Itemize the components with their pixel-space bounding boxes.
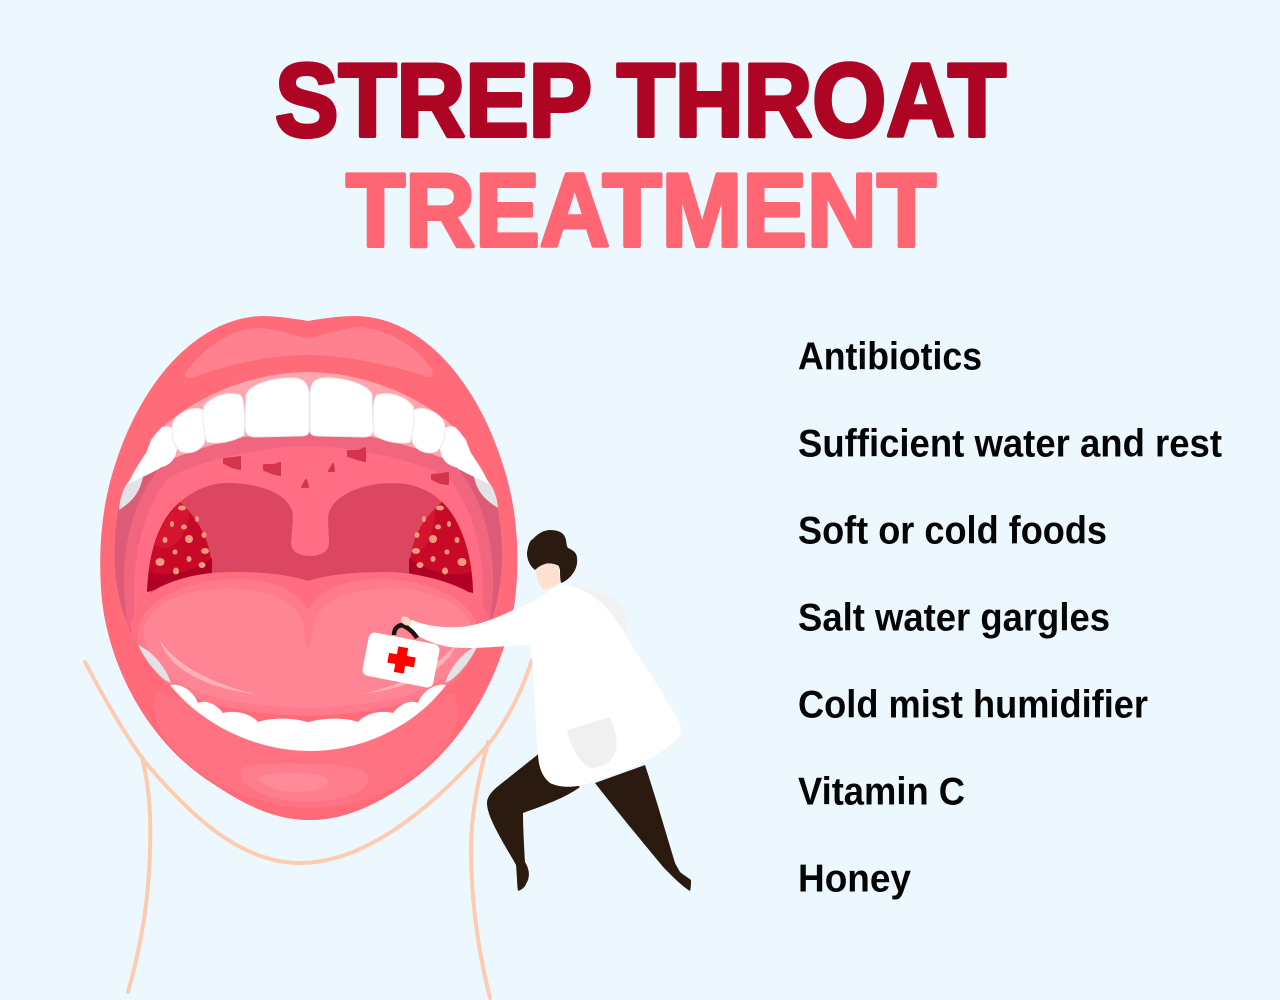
lips xyxy=(100,316,517,820)
doctor hair xyxy=(527,530,577,583)
case handle xyxy=(394,625,417,638)
treatment list xyxy=(798,336,1222,900)
case body xyxy=(361,632,441,688)
upper gum xyxy=(150,372,467,470)
doctor legs xyxy=(487,752,691,891)
illustration: doctor xyxy=(361,530,691,891)
illustration: neck and jaw outline xyxy=(85,660,532,998)
illustration: open mouth xyxy=(100,316,517,820)
throat and uvula xyxy=(148,483,472,600)
item: water and rest: Sufficient water and rest xyxy=(798,422,1222,466)
palate blotches xyxy=(224,448,448,487)
coat pocket xyxy=(567,717,617,768)
mouth interior xyxy=(115,372,502,660)
doctor back shadow xyxy=(570,585,627,640)
title xyxy=(275,43,1006,269)
left tonsil xyxy=(147,502,212,592)
item: salt water gargles: Salt water gargles xyxy=(798,596,1110,640)
palate ring xyxy=(124,430,493,628)
palate xyxy=(134,446,483,630)
lower lip gloss xyxy=(240,763,368,802)
title line: strep throat: STREP THROAT xyxy=(275,43,1006,159)
item: vitamin c: Vitamin C xyxy=(798,770,965,814)
right tonsil xyxy=(409,502,473,593)
tongue xyxy=(130,572,490,716)
upper lip highlight xyxy=(185,327,433,378)
lower teeth xyxy=(138,645,478,751)
item: antibiotics: Antibiotics xyxy=(798,336,982,378)
lower lip xyxy=(102,600,515,820)
item: soft or cold foods: Soft or cold foods xyxy=(798,510,1107,552)
medical case xyxy=(361,625,441,688)
title line: treatment: TREATMENT xyxy=(346,153,936,269)
item: humidifier: Cold mist humidifier xyxy=(798,684,1148,726)
upper teeth xyxy=(119,378,498,510)
doctor face xyxy=(535,560,560,589)
red cross xyxy=(386,645,417,675)
doctor hand xyxy=(399,615,413,627)
doctor coat xyxy=(409,585,681,787)
item: honey: Honey xyxy=(798,858,911,900)
lower lip highlight xyxy=(154,690,458,808)
